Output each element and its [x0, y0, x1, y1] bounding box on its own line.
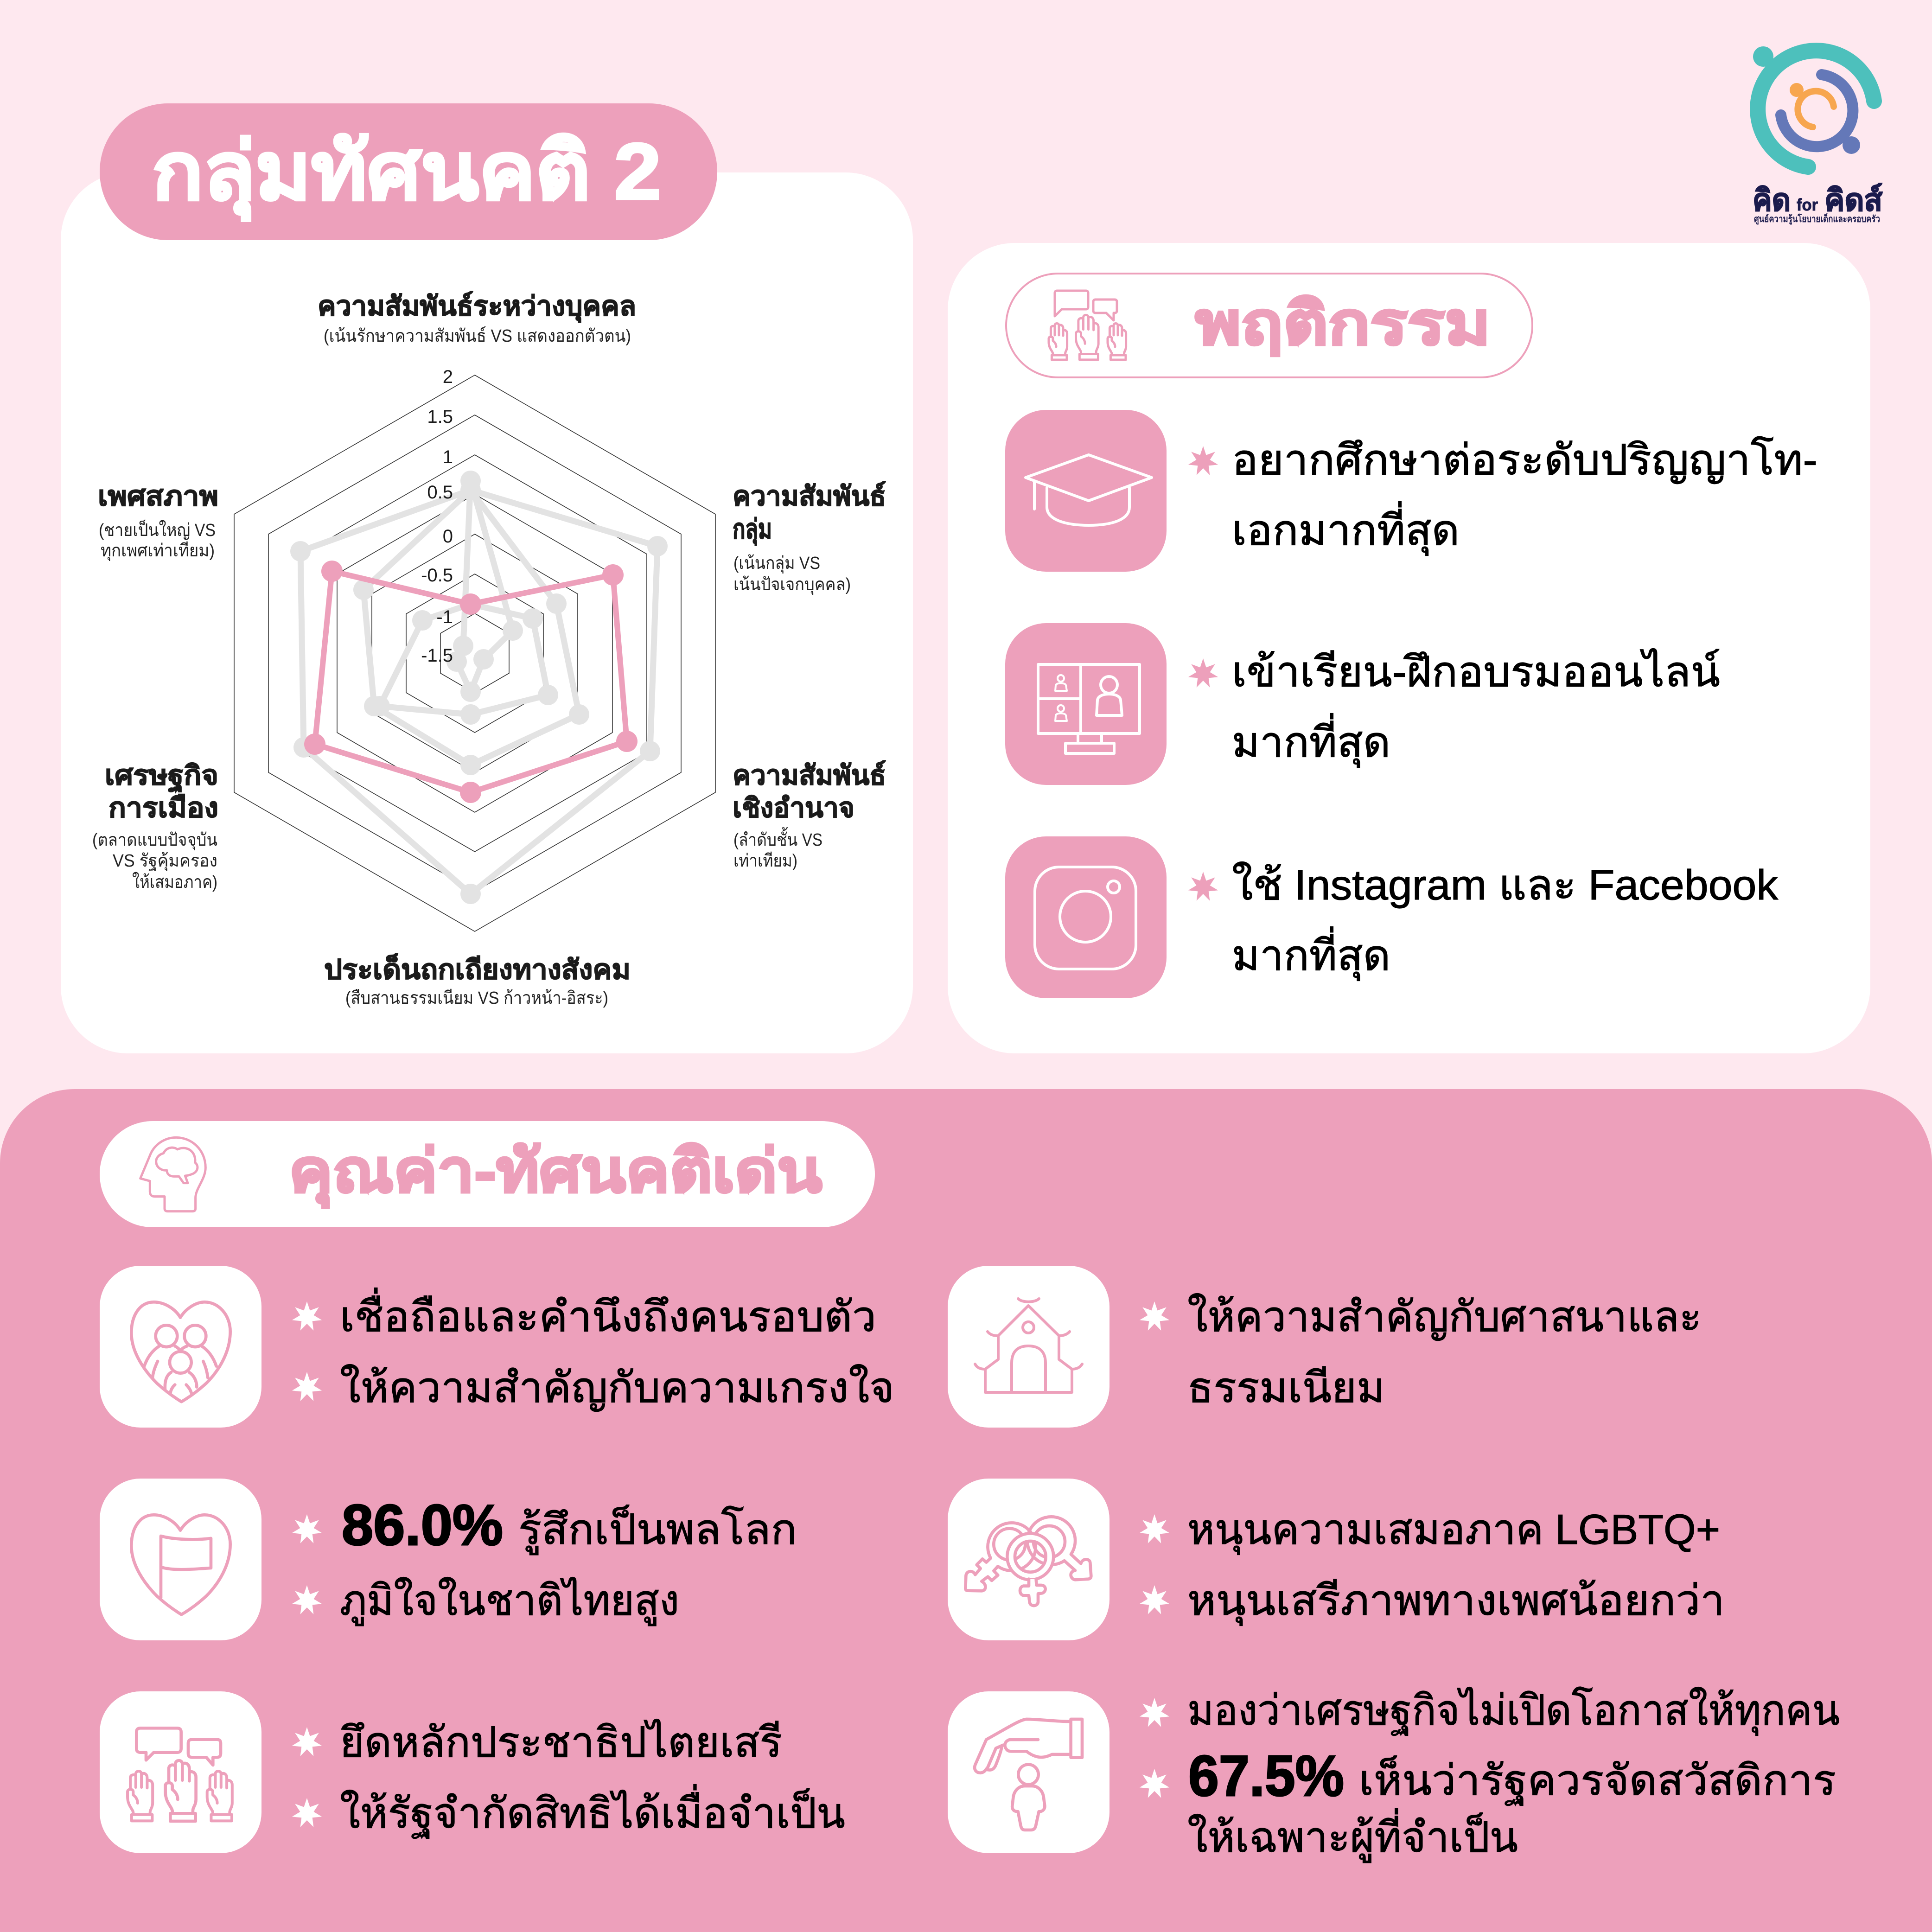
item: national pride — [100, 1479, 797, 1640]
item text: รู้สึกเป็นพลโลก — [518, 1505, 797, 1555]
star bullets — [1140, 1514, 1169, 1614]
axis scale labels: 0.5 — [427, 482, 453, 503]
item text: เข้าเรียน-ฝึกอบรมออนไลน์ — [1232, 649, 1720, 695]
axis label: bottom: (สืบสานธรรมเนียม VS ก้าวหน้า-อิสระ) — [345, 988, 608, 1008]
axis label: gender: ทุกเพศเท่าเทียม) — [101, 541, 215, 561]
icon: protective hand over person — [948, 1691, 1109, 1853]
logo wordmark: คิดส์ — [1824, 183, 1883, 217]
star bullets — [292, 1514, 322, 1614]
values heading: คุณค่า-ทัศนคติเด่น — [289, 1138, 822, 1208]
item text: ภูมิใจในชาติไทยสูง — [340, 1577, 679, 1626]
axis label: group relations: กลุ่ม — [733, 514, 772, 546]
item: social harmony — [100, 1266, 894, 1428]
title pill — [100, 103, 717, 240]
item text — [1232, 436, 1817, 556]
axis label: bottom — [324, 953, 631, 1008]
behaviour heading pill — [1006, 274, 1532, 377]
panel background — [948, 243, 1870, 1053]
logo tagline: ศูนย์ความรู้นโยบายเด็กและครอบครัว — [1754, 213, 1880, 225]
item text: เอกมากที่สุด — [1232, 501, 1460, 556]
gray comparison series — [300, 481, 657, 894]
item text — [340, 1493, 797, 1626]
axis label: top — [318, 291, 636, 346]
item: online learning — [1005, 623, 1720, 785]
axis label: top: (เน้นรักษาความสัมพันธ์ VS แสดงออกตัวตน) — [324, 326, 631, 346]
item text: หนุนความเสมอภาค LGBTQ+ — [1187, 1506, 1720, 1556]
panel: radar chart — [61, 103, 913, 1053]
axis label: bottom: ประเด็นถกเถียงทางสังคม — [324, 953, 631, 985]
gray data points — [290, 471, 668, 904]
panel background — [0, 1089, 1932, 1932]
panel: behaviour — [948, 243, 1870, 1053]
item: economy and welfare — [948, 1687, 1840, 1863]
logo mark — [1753, 46, 1874, 167]
radar chart — [234, 367, 715, 931]
statistic: 86.0% — [342, 1493, 503, 1557]
axis scale labels — [421, 367, 453, 666]
icon: raised hands and speech — [1049, 291, 1126, 360]
item text: อยากศึกษาต่อระดับปริญญาโท- — [1232, 436, 1817, 485]
star bullets — [292, 1301, 322, 1401]
axis label: power relations — [733, 760, 886, 871]
logo wordmark — [1753, 183, 1883, 217]
axis label: gender — [98, 481, 218, 561]
item: democracy — [100, 1691, 845, 1853]
item text — [1232, 649, 1720, 768]
item text: ให้ความสำคัญกับศาสนาและ — [1187, 1294, 1702, 1341]
icon: instagram — [1005, 836, 1167, 998]
axis label: political economy: (ตลาดแบบปัจจุบัน — [92, 830, 217, 850]
axis label: gender: เพศสภาพ — [98, 481, 218, 511]
axis scale labels: -0.5 — [421, 565, 453, 586]
panel background — [61, 172, 913, 1053]
axis label: group relations — [733, 481, 886, 595]
icon: flag heart — [100, 1479, 261, 1640]
icon: head with brain — [140, 1137, 205, 1211]
item text: หนุนเสรีภาพทางเพศน้อยกว่า — [1187, 1577, 1725, 1626]
icon: raised hands and speech — [100, 1691, 261, 1853]
pink series — [304, 561, 638, 803]
values heading pill — [100, 1121, 875, 1227]
axis label: top: ความสัมพันธ์ระหว่างบุคคล — [318, 291, 636, 323]
star bullets — [292, 1727, 322, 1827]
star bullet — [1188, 658, 1218, 688]
axis scale labels: 1.5 — [427, 407, 453, 427]
item text: ธรรมเนียม — [1187, 1365, 1385, 1411]
logo wordmark: for — [1797, 195, 1818, 214]
axis label: group relations: (เน้นกลุ่ม VS — [733, 554, 820, 574]
item text: มากที่สุด — [1232, 713, 1390, 768]
axis scale labels: 0 — [443, 526, 453, 547]
axis label: gender: (ชายเป็นใหญ่ VS — [99, 519, 216, 540]
item: religion — [948, 1266, 1702, 1428]
star bullets — [1140, 1698, 1169, 1798]
item text: ยึดหลักประชาธิปไตยเสรี — [340, 1719, 782, 1766]
item text: เชื่อถือและคำนึงถึงคนรอบตัว — [340, 1288, 876, 1340]
star bullet — [1188, 446, 1218, 475]
item: gender equality — [948, 1479, 1725, 1640]
axis label: political economy: เศรษฐกิจ — [105, 760, 218, 793]
item: social media — [1005, 836, 1779, 998]
logo — [1753, 46, 1883, 225]
axis label: political economy — [92, 760, 218, 892]
item: graduate study — [1005, 410, 1817, 572]
item text: มากที่สุด — [1232, 926, 1390, 982]
item text: เห็นว่ารัฐควรจัดสวัสดิการ — [1359, 1755, 1836, 1806]
item text: ให้รัฐจำกัดสิทธิได้เมื่อจำเป็น — [340, 1784, 845, 1839]
item text — [340, 1719, 845, 1839]
axis label: power relations: เชิงอำนาจ — [733, 793, 854, 823]
item text: ให้เฉพาะผู้ที่จำเป็น — [1187, 1808, 1518, 1863]
axis scale labels: 1 — [443, 447, 453, 467]
item text — [1187, 1506, 1725, 1626]
title text: กลุ่มทัศนคติ 2 — [152, 127, 661, 221]
axis scale labels: -1 — [436, 607, 453, 627]
item text — [1187, 1294, 1702, 1411]
item text: ให้ความสำคัญกับความเกรงใจ — [340, 1365, 894, 1412]
star bullet — [1188, 872, 1218, 901]
star bullet — [1140, 1301, 1169, 1331]
axis scale labels: -1.5 — [421, 645, 453, 666]
axis label: power relations: (ลำดับชั้น VS — [733, 827, 823, 850]
icon: graduation cap — [1005, 410, 1167, 572]
icon: family heart — [100, 1266, 261, 1428]
item text — [1232, 862, 1779, 982]
behaviour heading: พฤติกรรม — [1195, 291, 1491, 357]
axis label: political economy: การเมือง — [108, 793, 218, 823]
item text: มองว่าเศรษฐกิจไม่เปิดโอกาสให้ทุกคน — [1187, 1687, 1840, 1736]
axis scale labels: 2 — [443, 367, 453, 387]
axis label: political economy: VS รัฐคุ้มครอง — [113, 851, 217, 871]
item text — [340, 1288, 894, 1412]
axis label: group relations: ความสัมพันธ์ — [733, 481, 886, 511]
item text: ใช้ Instagram และ Facebook — [1232, 862, 1779, 909]
logo wordmark: คิด — [1753, 183, 1791, 217]
panel: values and attitudes — [0, 1089, 1932, 1932]
item text — [1187, 1687, 1840, 1863]
axis label: political economy: ให้เสมอภาค) — [132, 872, 217, 892]
statistic: 67.5% — [1188, 1744, 1344, 1808]
axis label: power relations: เท่าเทียม) — [733, 851, 797, 871]
icon: gender symbols — [948, 1479, 1109, 1640]
icon: temple — [948, 1266, 1109, 1428]
axis label: power relations: ความสัมพันธ์ — [733, 760, 886, 791]
axis label: group relations: เน้นปัจเจกบุคคล) — [733, 575, 851, 595]
icon: video call monitor — [1005, 623, 1167, 785]
